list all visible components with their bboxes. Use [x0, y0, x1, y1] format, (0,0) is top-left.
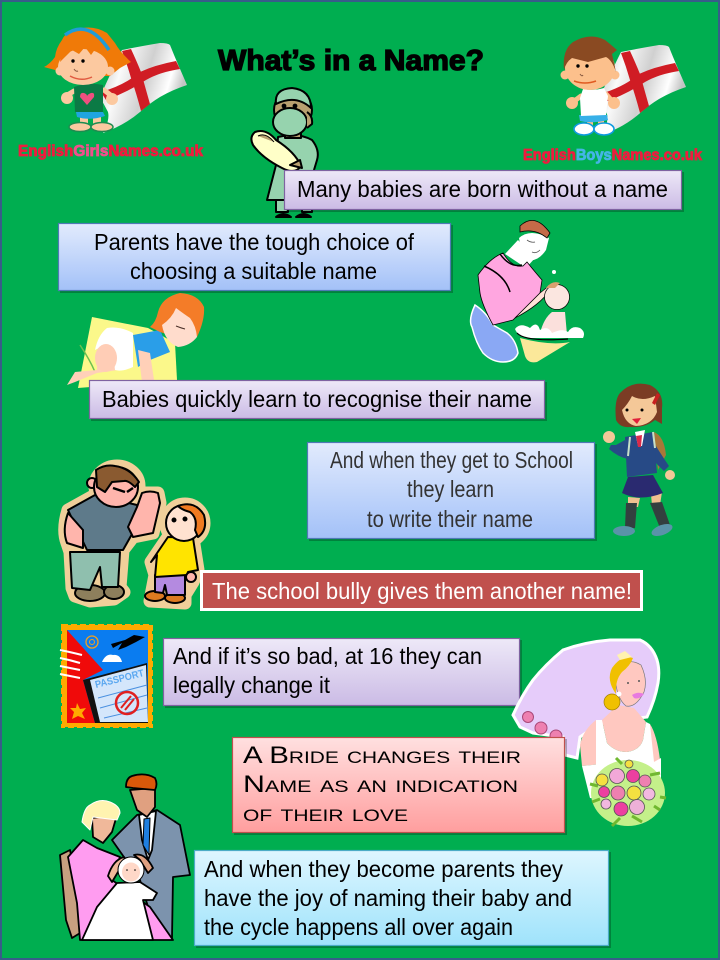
panel: bride: [232, 738, 567, 835]
panel: babies recognise name: Babies quickly learn to recognise their name: [102, 386, 532, 412]
icon: England flag behind boy: [599, 45, 686, 135]
panel: school: they learn: [407, 476, 494, 502]
icon: girl character: [44, 28, 131, 131]
panel: legally change: [164, 638, 522, 708]
panel: many babies: [284, 170, 684, 212]
icon: bride: [513, 640, 666, 826]
icon: doctor holding newborn: [251, 88, 318, 217]
small boy: [145, 504, 205, 603]
icon: schoolgirl: [603, 384, 675, 538]
panel: many babies: Many babies are born without a name: [297, 176, 668, 202]
panel: become parents: have the joy of naming their baby and: [204, 885, 572, 911]
panel: school bully: The school bully gives them another name!: [212, 578, 632, 604]
panel: school: to write their name: [367, 506, 533, 532]
panel: legally change: And if it’s so bad, at 16 they can: [173, 643, 482, 669]
icon: passport stamp: PASSPORT: [94, 668, 145, 691]
panel: become parents: And when they become parents they: [204, 856, 563, 882]
panel: bride: of their love: [243, 800, 408, 827]
icon: parents with christened baby: [60, 774, 190, 940]
icon: bully and small boy: [65, 466, 205, 603]
tan sticker outline: [65, 466, 204, 603]
icon: parent washing baby: [471, 220, 584, 362]
title: What’s in a Name?: [218, 45, 484, 77]
panel: become parents: [194, 850, 611, 948]
logo: English Boys Names: [523, 36, 702, 164]
panel: school: [308, 442, 597, 541]
panel: legally change: legally change it: [173, 672, 331, 698]
icon: England flag behind girl: [100, 43, 187, 133]
panel: bride: A Bride changes their: [243, 742, 521, 769]
panel: babies recognise name: [90, 380, 547, 421]
panel: school: And when they get to School: [330, 447, 573, 473]
panel: become parents: the cycle happens all over again: [204, 914, 513, 940]
logo text: EnglishBoysNames.co.uk: EnglishBoysNames.co.uk: [523, 147, 702, 164]
panel: parents choice: Parents have the tough choice of: [94, 229, 415, 255]
panel: bride: Name as an indication: [243, 771, 518, 798]
icon: crawling baby: [67, 293, 204, 388]
icon: boy character: [560, 36, 620, 135]
logo text: EnglishGirlsNames.co.uk: EnglishGirlsNames.co.uk: [18, 143, 203, 160]
panel: school bully: [200, 570, 643, 611]
panel: parents choice: [58, 224, 453, 293]
panel: parents choice: choosing a suitable name: [130, 258, 377, 284]
logo: English Girls Names: [18, 28, 203, 160]
big boy: [65, 466, 160, 601]
icon: passport stamp: [60, 625, 152, 727]
